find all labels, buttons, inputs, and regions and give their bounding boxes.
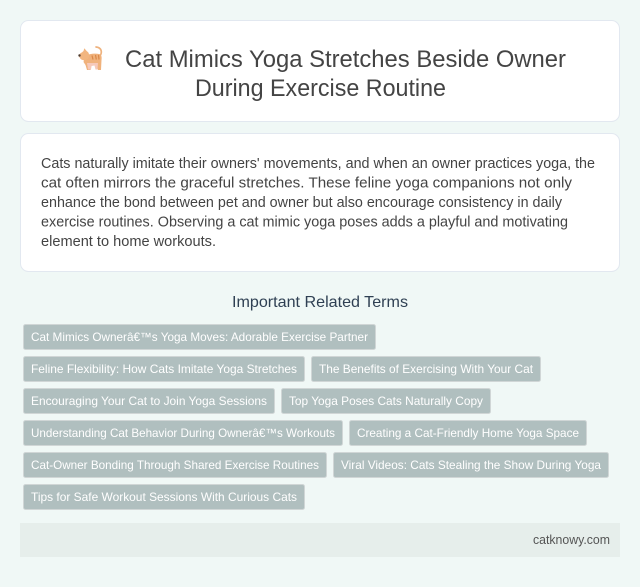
tag list bbox=[24, 324, 608, 510]
title: Cat Mimics Yoga Stretches Beside Owner bbox=[125, 46, 566, 73]
tag bbox=[282, 388, 490, 414]
tag: Feline Flexibility: How Cats Imitate Yoga Stretches bbox=[31, 362, 297, 376]
tag bbox=[24, 452, 326, 478]
text block: description: element to home workouts. bbox=[41, 234, 216, 250]
tag: The Benefits of Exercising With Your Cat bbox=[319, 362, 534, 376]
tag bbox=[24, 356, 304, 382]
text block: description: cat often mirrors the graceful stretches. These feline yoga companions not only bbox=[41, 176, 573, 192]
tag: Creating a Cat-Friendly Home Yoga Space bbox=[357, 426, 579, 440]
title bbox=[125, 46, 566, 102]
tag bbox=[24, 484, 304, 510]
footer bbox=[20, 523, 620, 557]
tag bbox=[334, 452, 608, 478]
tag: Cat-Owner Bonding Through Shared Exercise Routines bbox=[31, 458, 319, 472]
tag: Top Yoga Poses Cats Naturally Copy bbox=[289, 394, 483, 408]
tag: Tips for Safe Workout Sessions With Curious Cats bbox=[31, 490, 297, 504]
tag bbox=[24, 420, 342, 446]
tag: Encouraging Your Cat to Join Yoga Sessions bbox=[31, 394, 267, 408]
panel: title card bbox=[20, 20, 620, 122]
text block: description: enhance the bond between pet and owner but also encourage consistency in daily bbox=[41, 195, 563, 211]
text block: description bbox=[41, 156, 595, 250]
text block: description: exercise routines. Observing a cat mimic yoga poses adds a playful and motivating bbox=[41, 214, 568, 230]
icon: cat bbox=[78, 47, 102, 70]
tag: Understanding Cat Behavior During Ownerâ€™s Workouts bbox=[31, 426, 335, 440]
tag bbox=[312, 356, 540, 382]
tag bbox=[350, 420, 586, 446]
panel: description bbox=[20, 134, 620, 272]
heading: related terms: Important Related Terms bbox=[232, 294, 408, 311]
title: During Exercise Routine bbox=[195, 75, 446, 102]
text block: description: Cats naturally imitate their owners' movements, and when an owner practices yoga, the bbox=[41, 156, 595, 172]
tag bbox=[24, 324, 376, 350]
footer: catknowy.com bbox=[533, 533, 610, 547]
tag bbox=[24, 388, 274, 414]
tag: Cat Mimics Ownerâ€™s Yoga Moves: Adorable Exercise Partner bbox=[31, 330, 368, 344]
tag: Viral Videos: Cats Stealing the Show During Yoga bbox=[341, 458, 601, 472]
